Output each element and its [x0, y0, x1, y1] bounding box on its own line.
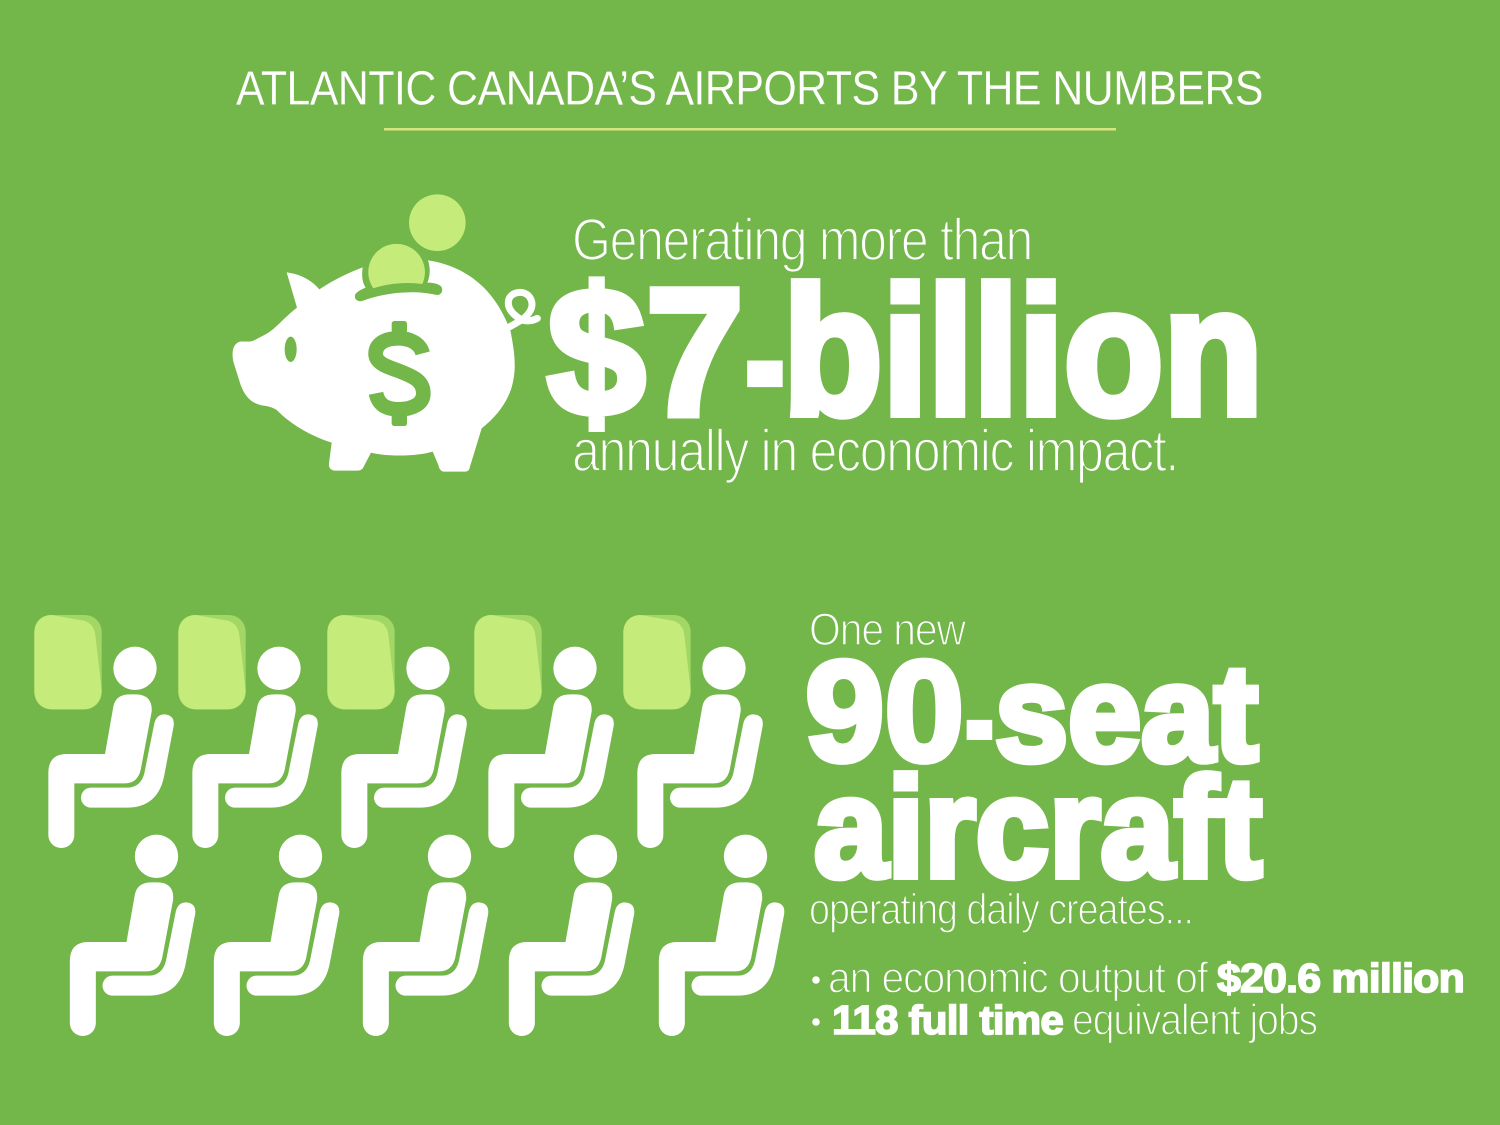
- icon: falling coin: [409, 194, 466, 251]
- icon: seated passenger: [70, 835, 195, 1036]
- text: economic output bullet: [812, 954, 1464, 1002]
- text: jobs bullet: [812, 996, 1317, 1044]
- icon: window 4: [474, 615, 542, 709]
- icon: pig tail: [508, 292, 537, 327]
- text: 90-seat: 90: [805, 632, 964, 792]
- text: aircraft: aircraft: [814, 748, 1262, 908]
- icon: seated passenger: [659, 835, 784, 1036]
- title: ATLANTIC CANADA’S AIRPORTS BY THE NUMBERS: [236, 62, 1263, 116]
- text: $20.6 million: $20.6 million: [1217, 955, 1464, 1001]
- text: 90-seat: -: [964, 639, 995, 798]
- icon: seated passenger: [192, 647, 318, 848]
- text: one new: One new: [809, 604, 967, 655]
- icon: seated passenger: [637, 647, 763, 848]
- text: 90-seat: [805, 632, 1258, 798]
- text: $7-billion: [547, 249, 1263, 460]
- icon: window 1: [34, 615, 102, 709]
- icon: pig body: [233, 260, 515, 472]
- text: operating daily creates: operating daily creates...: [809, 885, 1193, 934]
- text: 118 full time: 118 full time: [832, 997, 1063, 1043]
- text: annually in economic impact: annually in economic impact.: [572, 418, 1178, 484]
- icon: coin entering slot: [368, 244, 425, 288]
- text: aircraft statement: [805, 604, 1262, 934]
- icon: seated passenger: [214, 835, 339, 1036]
- icon: seated passenger: [48, 647, 174, 848]
- icon: dollar sign: [376, 321, 423, 426]
- seated passengers back row: [70, 835, 784, 1036]
- text: generating more than: Generating more than: [572, 207, 1032, 273]
- icon: pig eye: [285, 337, 297, 362]
- text: equivalent jobs: equivalent jobs: [1072, 996, 1317, 1044]
- icon: seated passenger: [341, 647, 467, 848]
- text: $7-billion: billion: [783, 249, 1263, 453]
- icon: piggy bank with coins: [233, 194, 537, 472]
- text: an economic output of: an economic output of: [828, 954, 1209, 1002]
- text: 90-seat: seat: [995, 638, 1258, 790]
- seat windows row: [34, 615, 691, 709]
- seated passengers front row: [48, 647, 763, 848]
- text: economic impact statement: [547, 207, 1263, 484]
- icon: seated passenger: [509, 835, 634, 1036]
- icon: seated passenger: [363, 835, 488, 1036]
- icon: window 3: [327, 615, 395, 709]
- text: $7-billion: -: [744, 256, 786, 460]
- icon: window 5: [623, 615, 691, 709]
- icon: seated passenger: [488, 647, 614, 848]
- icon: window 2: [178, 615, 246, 709]
- text: $7-billion: $7: [547, 250, 744, 454]
